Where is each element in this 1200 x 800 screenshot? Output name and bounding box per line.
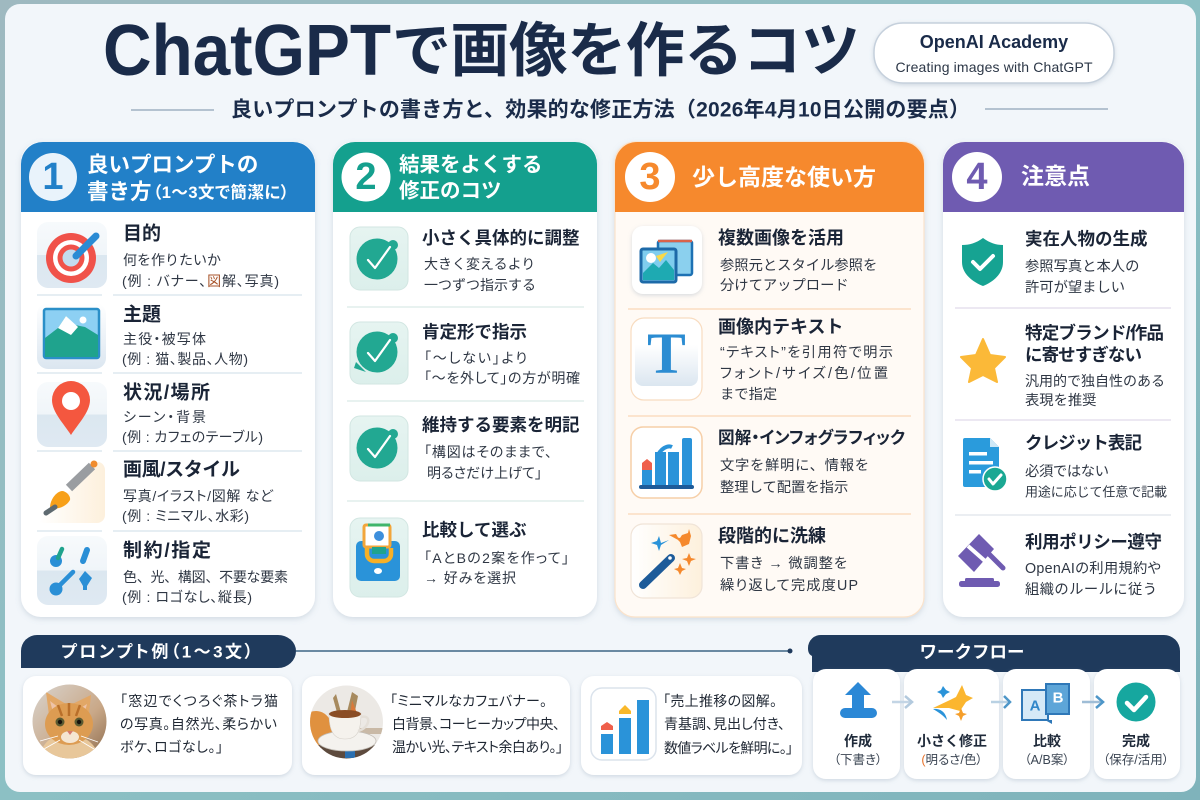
arrow: step 2 to 3: [991, 696, 1010, 708]
item: small adjustments: 小さく具体的に調整: [422, 228, 580, 248]
item: situation: [37, 381, 263, 447]
item: brands: 表現を推奨: [1025, 392, 1096, 409]
title: ChatGPT: [103, 11, 391, 91]
panel 3 header: 3: [639, 156, 661, 198]
panel 1 header: 書き方: [87, 180, 152, 204]
workflow heading: ワークフロー: [920, 642, 1024, 662]
item: situation: シーン・背景: [123, 409, 206, 425]
icon: A B panels: B: [1053, 690, 1064, 706]
prompt text: の写真。自然光、柔らかい: [120, 716, 277, 732]
item: usage policy: OpenAIの利用規約や: [1025, 560, 1161, 577]
prompt text: [120, 693, 278, 755]
item: gradual refinement: [631, 524, 858, 598]
connector line with dot: [296, 648, 792, 654]
icon: gavel: [958, 534, 1003, 587]
item: brands: 汎用的で独自性のある: [1025, 373, 1165, 389]
item: subject: (例 : 猫、製品、人物): [122, 351, 248, 367]
item: style: 画風/スタイル: [123, 458, 240, 480]
item: positive instructions: 「〜しない」より: [424, 350, 527, 366]
item: brands: に寄せすぎない: [1025, 345, 1142, 365]
item: text in image: まで指定: [720, 386, 777, 403]
icon: sales chart: [591, 688, 656, 760]
workflow step: compare: [1003, 669, 1090, 779]
prompt text: 「ミニマルなカフェバナー。: [390, 693, 547, 709]
icon: target: [37, 222, 107, 288]
item: keep elements: 明るさだけ上げて」: [427, 465, 542, 481]
workflow step: create: 作成: [844, 733, 872, 749]
item: multiple images: 分けてアップロード: [720, 277, 849, 294]
prompt text: ボケ、ロゴなし。」: [120, 739, 223, 755]
item: keep elements: 維持する要素を明記: [422, 415, 580, 435]
item: infographics: 文字を鮮明に、情報を: [720, 457, 869, 474]
icon: letter T: T: [647, 320, 686, 386]
item: situation: 状況/場所: [123, 382, 210, 404]
icon: stacked pictures: [632, 226, 702, 294]
item: situation: (例 : カフェのテーブル): [122, 429, 263, 445]
icon: A B panels: A: [1030, 698, 1041, 714]
item: infographics: 図解・インフォグラフィック: [718, 428, 905, 448]
workflow step: complete: 完成: [1122, 733, 1150, 749]
item: credit: 必須ではない: [1025, 463, 1109, 480]
prompt text: 白背景、コーヒーカップ中央、: [392, 716, 560, 732]
item: credit: クレジット表記: [1025, 433, 1142, 453]
icon: picture: [37, 303, 106, 369]
item: keep elements: [350, 415, 580, 481]
item: constraints: (例 : ロゴなし、縦長): [122, 589, 252, 605]
workflow step: compare: （A/B案）: [1024, 753, 1070, 767]
subtitle: 良いプロンプトの書き方と、効果的な修正方法（2026年4月10日公開の要点）: [231, 98, 970, 122]
panel 1: good prompts: [21, 142, 315, 617]
prompt text: [390, 693, 563, 755]
icon: comparison card: [350, 518, 408, 597]
item: style: 写真/イラスト/図解 など: [123, 488, 274, 504]
item: credit: 用途に応じて任意で記載: [1025, 484, 1167, 500]
item: usage policy: [958, 532, 1162, 598]
item: real people: 許可が望ましい: [1025, 279, 1125, 296]
title: で画像を作るコツ: [392, 18, 860, 84]
item: text in image: “テキスト”を引用符で明示: [720, 344, 893, 361]
prompt card: cat photo: [23, 676, 292, 775]
item: text in image: 画像内テキスト: [718, 317, 843, 337]
workflow step: complete: （保存/活用）: [1103, 753, 1169, 767]
item: positive instructions: 肯定形で指示: [422, 322, 527, 342]
item: multiple images: [632, 226, 877, 294]
item: multiple images: 参照元とスタイル参照を: [720, 257, 877, 274]
item: brands: [961, 323, 1165, 409]
icon: check: [350, 227, 408, 290]
panel 1 header: [21, 142, 315, 212]
badge: OpenAI Academy: Creating images with ChatGPT: [896, 59, 1093, 75]
item: brands: 特定ブランド/作品: [1025, 323, 1164, 343]
prompt card: sales chart: [581, 676, 802, 775]
item: purpose: 目的: [123, 222, 161, 244]
item: small adjustments: 一つずつ指示する: [424, 277, 536, 293]
arrow: step 3 to 4: [1082, 696, 1103, 708]
workflow step: small fix: 小さく修正: [917, 733, 987, 749]
item: usage policy: 利用ポリシー遵守: [1025, 532, 1162, 552]
panel 1 header: 良いプロンプトの: [87, 153, 258, 177]
item: infographics: 整理して配置を指示: [720, 479, 848, 496]
item: compare: 「AとBの2案を作って」: [424, 550, 569, 566]
icon: check: [350, 322, 408, 384]
panel 2: revision tips: [333, 142, 597, 617]
item: compare: [350, 518, 569, 597]
icon: shield: [962, 238, 1003, 286]
panel 2 header: 修正のコツ: [399, 180, 502, 202]
panel 2 header: [333, 142, 597, 212]
prompt text: 「窓辺でくつろぐ茶トラ猫: [120, 693, 278, 709]
icon: check circle: [1116, 682, 1156, 722]
arrow: step 1 to 2: [892, 696, 912, 708]
icon: paint brush: [39, 460, 105, 523]
item: positive instructions: 「〜を外して」の方が明確: [424, 370, 580, 386]
workflow step: create: （下書き）: [834, 753, 882, 767]
workflow step: small fix: (明るさ/色）: [921, 753, 983, 767]
workflow step: small fix: [904, 669, 999, 779]
item: text in image: フォント/サイズ/色/位置: [720, 365, 888, 382]
panel 4 header: [943, 142, 1184, 212]
panel 4 header: 注意点: [1021, 163, 1090, 189]
item: small adjustments: 大きく変えるより: [424, 256, 535, 272]
panel 2 header: 2: [355, 156, 377, 198]
icon: star: [961, 339, 1005, 382]
item: compare: → 好みを選択: [424, 570, 516, 586]
prompt text: 「売上推移の図解。: [663, 693, 777, 709]
item: real people: 実在人物の生成: [1025, 229, 1148, 249]
item: style: [39, 458, 274, 524]
panel 2 header: 結果をよくする: [399, 154, 542, 176]
item: keep elements: 「構図はそのままで、: [424, 444, 552, 460]
workflow step: compare: 比較: [1033, 733, 1061, 749]
item: purpose: 何を作りたいか: [123, 252, 221, 268]
item: text in image: [631, 317, 893, 403]
prompt examples heading: [21, 635, 296, 668]
item: usage policy: 組織のルールに従う: [1025, 581, 1157, 598]
panel 3 header: [615, 142, 924, 212]
item: purpose: (例 : バナー、図解、写真): [122, 273, 279, 289]
prompt examples heading: プロンプト例（1〜3文）: [61, 642, 253, 662]
badge: OpenAI Academy: OpenAI Academy: [920, 32, 1068, 52]
panel 3 header: 少し高度な使い方: [692, 164, 876, 190]
item: credit: [963, 433, 1167, 500]
icon: upload: [840, 682, 877, 718]
photo: coffee cup: [310, 685, 383, 759]
icon: map pin: [37, 381, 107, 447]
icon: sparkles: [933, 685, 973, 721]
panel 4 header: 4: [966, 156, 988, 198]
prompt card: cafe banner: [302, 676, 570, 775]
item: constraints: 色、光、構図、不要な要素: [123, 569, 288, 585]
workflow heading: [808, 635, 1180, 672]
icon: constraint tools: [37, 536, 107, 605]
title: [103, 11, 860, 91]
icon: letter T: [631, 318, 702, 400]
item: gradual refinement: 繰り返して完成度UP: [720, 577, 858, 594]
icon: magic wand: [631, 524, 702, 598]
photo: cat: [32, 684, 107, 762]
prompt text: 数値ラベルを鮮明に。」: [664, 740, 793, 756]
prompt text: 青基調、見出し付き、: [664, 716, 785, 732]
panel 1 header: 1: [42, 156, 64, 198]
item: small adjustments: [350, 227, 580, 293]
item: gradual refinement: 下書き → 微調整を: [720, 555, 847, 572]
item: positive instructions: [350, 322, 580, 386]
icon: document check: [963, 438, 1007, 491]
workflow step: complete: [1094, 669, 1180, 779]
item: constraints: [37, 536, 288, 605]
item: subject: 主題: [123, 304, 161, 326]
item: constraints: 制約/指定: [123, 540, 211, 562]
item: gradual refinement: 段階的に洗練: [718, 526, 826, 546]
item: infographics: [631, 427, 905, 498]
badge: OpenAI Academy: [874, 23, 1114, 83]
icon: A B panels: [1022, 684, 1069, 724]
panel 3: advanced use: [615, 142, 924, 617]
prompt text: [663, 693, 793, 756]
item: real people: 参照写真と本人の: [1025, 258, 1139, 275]
item: compare: 比較して選ぶ: [422, 520, 527, 540]
panel 1 header: （1〜3文で簡潔に）: [153, 182, 289, 202]
prompt text: 温かい光、テキスト余白あり。」: [392, 739, 563, 755]
item: subject: 主役・被写体: [123, 331, 206, 347]
item: real people: [962, 229, 1148, 296]
item: purpose: [37, 222, 279, 289]
workflow step: create: [813, 669, 900, 779]
item: subject: [37, 303, 248, 369]
icon: check: [350, 416, 408, 481]
icon: bar chart: [631, 427, 702, 498]
item: multiple images: 複数画像を活用: [718, 228, 844, 248]
item: style: (例 : ミニマル、水彩): [122, 508, 249, 524]
panel 4: cautions: [943, 142, 1184, 617]
